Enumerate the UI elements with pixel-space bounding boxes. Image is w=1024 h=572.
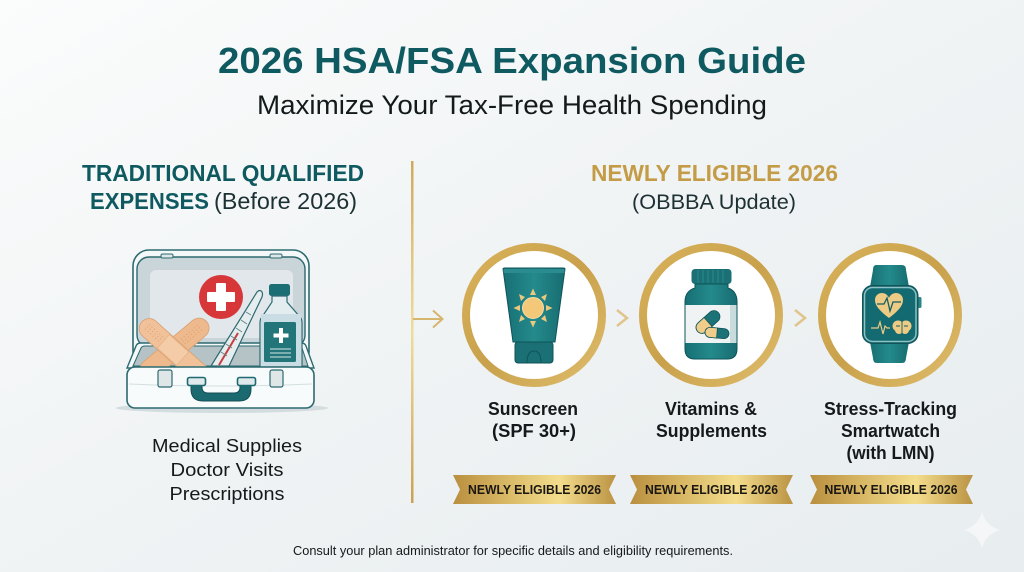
panel: smartwatch: [822, 247, 958, 383]
icon: supplement bottle: [685, 269, 737, 359]
arrow: divider to sunscreen: [413, 310, 442, 328]
ribbon 2: [630, 475, 793, 504]
ribbon 1: [453, 475, 616, 504]
icon: gold ring: [466, 247, 602, 383]
divider line: [411, 161, 414, 503]
heading: traditional qualified expenses: EXPENSES: [90, 188, 209, 214]
icon: smartwatch: [862, 265, 922, 363]
icon: medicine bottle: [260, 284, 302, 367]
icon: case handle: [188, 378, 256, 401]
text: traditional expenses list: Prescriptions: [170, 483, 284, 504]
icon: sparkle: [964, 512, 1000, 548]
heading: newly eligible 2026: NEWLY ELIGIBLE 2026: [591, 160, 838, 186]
icon: sunscreen tube: [503, 268, 565, 363]
icon: gold ring: [822, 247, 958, 383]
icon: chevron 2: [795, 310, 805, 326]
heading: traditional qualified expenses: [82, 160, 364, 214]
text: vitamins label: Supplements: [656, 421, 767, 441]
text: vitamins label: [656, 399, 767, 441]
text: sunscreen label: Sunscreen: [488, 399, 578, 419]
heading: newly eligible 2026: [591, 160, 838, 214]
subtitle: Maximize Your Tax-Free Health Spending: [257, 90, 767, 120]
text: traditional expenses list: Doctor Visits: [170, 459, 284, 480]
heading: traditional qualified expenses: (Before 2026): [214, 188, 357, 214]
text: vitamins label: Vitamins &: [665, 399, 757, 419]
heading: traditional qualified expenses: TRADITIONAL QUALIFIED: [82, 160, 364, 186]
text: sunscreen label: (SPF 30+): [492, 421, 576, 441]
icon: gold ring: [643, 247, 779, 383]
icon: chevron 1: [617, 310, 627, 326]
icon: first aid kit: [116, 250, 328, 413]
panel: sunscreen: [466, 247, 602, 383]
footer note: Consult your plan administrator for specific details and eligibility requirements.: [293, 544, 733, 558]
text: traditional expenses list: Medical Supplies: [152, 435, 302, 456]
ribbon 2: NEWLY ELIGIBLE 2026: [645, 482, 778, 497]
ribbon 3: [810, 475, 973, 504]
ribbon 1: NEWLY ELIGIBLE 2026: [468, 482, 601, 497]
text: sunscreen label: [488, 399, 578, 441]
heading: newly eligible 2026: (OBBBA Update): [632, 191, 796, 214]
icon: crossed bandages: [138, 318, 210, 366]
title: 2026 HSA/FSA Expansion Guide: [218, 40, 806, 81]
text: smartwatch label: (with LMN): [846, 443, 935, 463]
text: smartwatch label: Stress-Tracking: [824, 399, 957, 419]
ribbon 3: NEWLY ELIGIBLE 2026: [824, 482, 958, 497]
text: traditional expenses list: [152, 435, 302, 504]
panel: vitamins: [643, 247, 779, 383]
text: smartwatch label: [824, 399, 957, 463]
icon: thermometer: [211, 290, 262, 366]
text: smartwatch label: Smartwatch: [841, 421, 940, 441]
icon: red cross badge: [199, 275, 243, 319]
